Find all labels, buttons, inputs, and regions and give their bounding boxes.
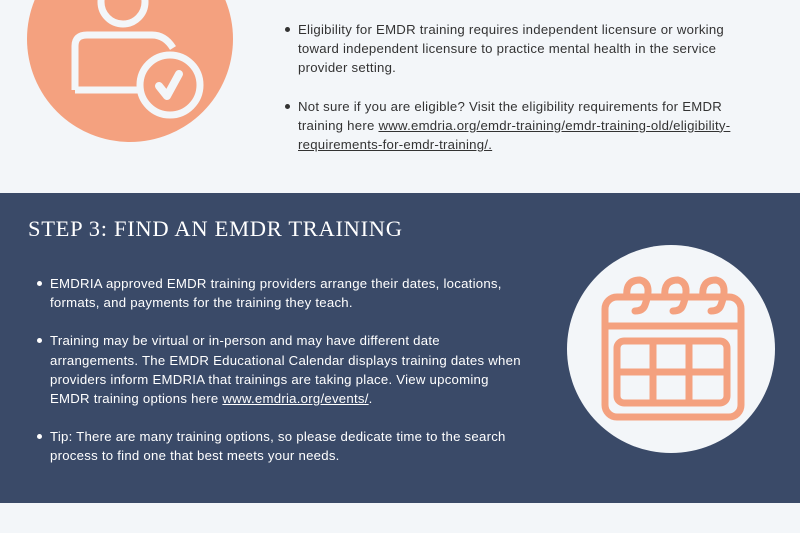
- text block: eligibility bullets: [285, 22, 730, 152]
- icon: person with check: [27, 0, 233, 142]
- text block: training bullets: EMDRIA approved EMDR training providers arrange their dates, locations, formats, and payments for the training they teach.: [50, 276, 502, 310]
- text block: eligibility bullets: Eligibility for EMDR training requires independent licensure or working toward independent licensure to practice mental health in the service provider setting.: [298, 22, 724, 75]
- panel: step 3: [0, 193, 800, 503]
- text block: training bullets: Training may be virtual or in-person and may have different date arrangements. The EMDR Educational Calendar displays training dates when providers inform EMDRIA that trainings are taking place. View upcoming EMDR training options here www.emdria.org/events/.: [50, 333, 521, 406]
- text block: training bullets: Tip: There are many training options, so please dedicate time to the search process to find one that best meets your needs.: [50, 429, 506, 463]
- icon: calendar: [567, 245, 775, 453]
- heading: step 3: STEP 3: FIND AN EMDR TRAINING: [28, 216, 403, 241]
- text block: eligibility bullets: Not sure if you are eligible? Visit the eligibility requirements for EMDR training here www.emdria.org/emdr-training/emdr-training-old/eligibility-requirements-for-emdr-training/.: [298, 99, 730, 152]
- text block: training bullets: [37, 276, 521, 463]
